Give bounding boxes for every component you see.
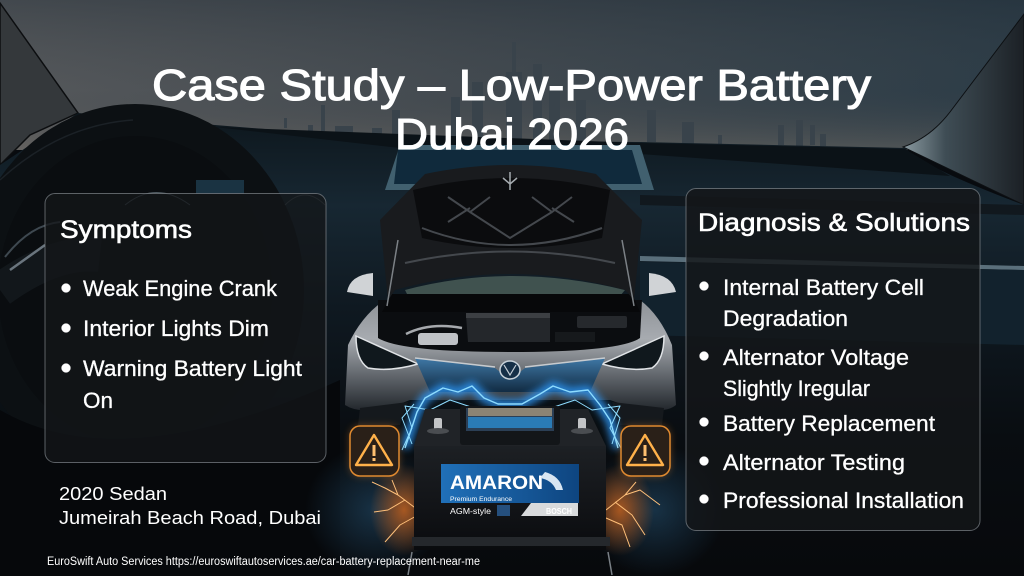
- premium tagline: Premium Endurance: [450, 496, 512, 503]
- battery tray: [408, 537, 612, 575]
- title: Dubai 2026: [395, 110, 629, 159]
- warning icon: left: [350, 426, 399, 476]
- vehicle and location note: Jumeirah Beach Road, Dubai: [59, 508, 321, 528]
- left headlight: [356, 336, 418, 369]
- wiper bar: [382, 294, 640, 312]
- engine bay: [378, 300, 642, 352]
- symptom: warning battery light on: On: [83, 388, 113, 413]
- title: [152, 61, 871, 159]
- symptom: interior lights dim: Interior Lights Dim: [83, 316, 269, 341]
- right mirror: [649, 273, 676, 296]
- AMARON brand: AMARON: [450, 473, 543, 494]
- item: professional installation: Professional Installation: [723, 488, 964, 513]
- car front with open hood: [345, 165, 676, 425]
- item: internal battery cell degradation: Internal Battery Cell: [723, 275, 924, 300]
- dash top shadow band: [215, 127, 950, 176]
- blue ambient glow: [305, 444, 725, 576]
- left mirror: [347, 273, 373, 296]
- symptom: warning battery light on: Warning Battery Light: [83, 356, 302, 381]
- panel: symptoms: [45, 194, 326, 462]
- electric arcs: blue: [402, 386, 622, 450]
- item: alternator voltage slightly irregular: Alternator Voltage: [723, 345, 909, 370]
- windshield below hood: [405, 276, 625, 296]
- battery label: [441, 464, 579, 503]
- BOSCH tag: [521, 503, 578, 516]
- symptom: weak engine crank: Weak Engine Crank: [83, 276, 278, 301]
- engine block: [466, 315, 550, 342]
- item: alternator testing: Alternator Testing: [723, 450, 905, 475]
- electric arcs: orange: [370, 464, 660, 556]
- windshield and sky: [0, 0, 1024, 150]
- hood logo: [503, 172, 517, 190]
- right A-pillar: [903, 14, 1024, 205]
- item: alternator voltage slightly irregular: [700, 345, 909, 401]
- left lower interior shade: [0, 380, 340, 576]
- AGM-style: AGM-style: [450, 507, 492, 516]
- dubai skyline: [284, 42, 826, 146]
- warning icon: right: [621, 426, 670, 476]
- grille: [415, 358, 605, 392]
- gauges: [125, 180, 325, 205]
- vehicle and location note: 2020 Sedan: [59, 484, 167, 504]
- item: internal battery cell degradation: [700, 275, 924, 331]
- panel: diagnosis and solutions: [686, 188, 980, 530]
- battery terminals: [427, 418, 593, 434]
- left A-pillar: [0, 3, 78, 165]
- left vent: [0, 222, 60, 260]
- battery top label: [466, 408, 554, 431]
- vehicle and location note: [59, 484, 321, 528]
- item: alternator voltage slightly irregular: Slightly Iregular: [723, 376, 870, 401]
- lower bumper dark pockets: [358, 402, 664, 425]
- car body: [345, 300, 676, 410]
- right headlight: [602, 336, 664, 369]
- battery lid: [414, 409, 606, 446]
- hood struts: [387, 240, 634, 306]
- title: Case Study – Low-Power Battery: [152, 61, 871, 110]
- battery case: [414, 446, 606, 550]
- BOSCH tag: BOSCH: [546, 507, 572, 516]
- item: battery replacement: Battery Replacement: [723, 411, 935, 436]
- car emblem: [500, 361, 520, 379]
- right dash trim: [640, 195, 1024, 215]
- heading: diagnosis and solutions: Diagnosis & Solutions: [698, 209, 970, 237]
- hood ribs: [405, 197, 615, 263]
- steering wheel: [0, 120, 288, 460]
- item: internal battery cell degradation: Degradation: [723, 306, 848, 331]
- hood panel: [380, 165, 642, 300]
- source footer: EuroSwift Auto Services https://euroswiftautoservices.ae/car-battery-replacement-near-me: [47, 556, 480, 568]
- blue tag: [497, 505, 510, 516]
- heading: symptoms: Symptoms: [60, 216, 192, 244]
- center screen: [385, 145, 654, 190]
- battery: [414, 406, 606, 550]
- symptom: warning battery light on: [62, 356, 302, 413]
- label swoosh: [540, 472, 563, 490]
